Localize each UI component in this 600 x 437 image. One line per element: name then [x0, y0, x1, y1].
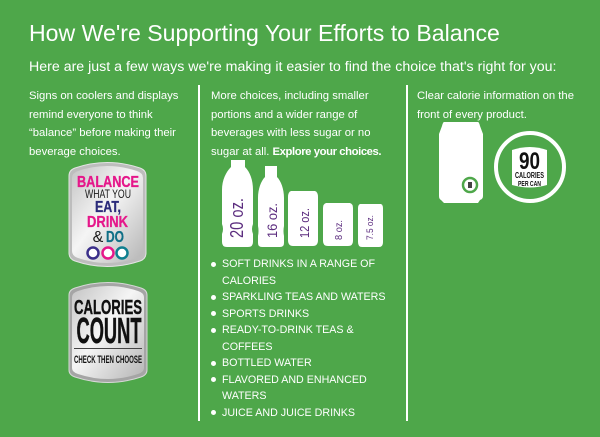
list of beverage types: SPORTS DRINKS: [222, 308, 309, 320]
panel: column 2 text: [211, 90, 381, 158]
icon: balance badge: EAT,: [95, 199, 121, 216]
divider right: [406, 85, 408, 421]
icon: calories count badge: CHECK THEN CHOOSE: [74, 354, 142, 366]
icon: 16 oz bottle: 16 oz.: [264, 203, 280, 238]
icon: balance badge: BALANCE: [77, 174, 139, 191]
list of beverage types: CALORIES: [222, 274, 276, 286]
icon: 7.5 oz can: [358, 204, 383, 247]
icon: 20 oz bottle: [222, 160, 253, 247]
icon: 90 calories per can: 90: [519, 148, 540, 175]
panel: column 2 text: More choices, including smaller: [211, 90, 369, 102]
list of beverage types: SPARKLING TEAS AND WATERS: [222, 291, 386, 303]
icon: balance badge: [69, 162, 146, 266]
panel: column 1 text: Signs on coolers and displays: [29, 90, 178, 102]
panel: column 2 text: beverages with less sugar or no: [211, 127, 370, 139]
icon: 8 oz can: 8 oz.: [334, 220, 345, 240]
list of beverage types: SOFT DRINKS IN A RANGE OF: [222, 258, 375, 270]
icon: 12 oz can: 12 oz.: [297, 208, 312, 238]
icon: balance badge: &: [93, 229, 104, 246]
icon: 16 oz bottle: [258, 166, 284, 247]
list of beverage types: JUICE AND JUICE DRINKS: [222, 406, 355, 418]
list of beverage types: COFFEES: [222, 340, 272, 352]
panel: column 2 text: sugar at all. Explore your choices.: [211, 146, 381, 158]
panel: column 3 text: [417, 90, 574, 121]
icon: 20 oz bottle: 20 oz.: [227, 198, 247, 238]
icon: 90 calories per can: [496, 133, 564, 201]
icon: 12 oz can: [288, 191, 318, 246]
icon: balance badge: DRINK: [87, 214, 128, 231]
icon: balance badge: DO: [106, 229, 124, 246]
list of beverage types: [211, 258, 386, 418]
panel: column 1 text: beverage choices.: [29, 146, 121, 158]
list of beverage types: FLAVORED AND ENHANCED: [222, 374, 367, 386]
icon: 7.5 oz can: 7.5 oz.: [365, 215, 375, 240]
icon: 8 oz can: [323, 203, 353, 246]
list of beverage types: WATERS: [222, 390, 267, 402]
title: How We're Supporting Your Efforts to Balance: [29, 20, 500, 46]
panel: column 1 text: remind everyone to think: [29, 109, 153, 121]
panel: column 2 text: portions and a wider range of: [211, 109, 357, 121]
icon: calories count badge: COUNT: [76, 310, 142, 351]
icon: can with calorie label: [439, 122, 483, 203]
panel: column 1 text: [29, 90, 178, 158]
icon: 90 calories per can: CALORIES: [515, 171, 544, 180]
subtitle: Here are just a few ways we're making it easier to find the choice that's right for you:: [29, 59, 556, 75]
divider left: [198, 85, 200, 421]
panel: column 3 text: front of every product.: [417, 109, 527, 121]
icon: balance badge: WHAT YOU: [85, 187, 131, 201]
icon: calories count badge: CALORIES: [74, 297, 142, 319]
list of beverage types: BOTTLED WATER: [222, 357, 312, 369]
icon: calories count badge: [69, 282, 147, 382]
panel: column 3 text: Clear calorie information on the: [417, 90, 574, 102]
icon: 90 calories per can: PER CAN: [518, 179, 541, 188]
panel: column 1 text: “balance” before making their: [29, 127, 176, 139]
list of beverage types: READY-TO-DRINK TEAS &: [222, 324, 354, 336]
